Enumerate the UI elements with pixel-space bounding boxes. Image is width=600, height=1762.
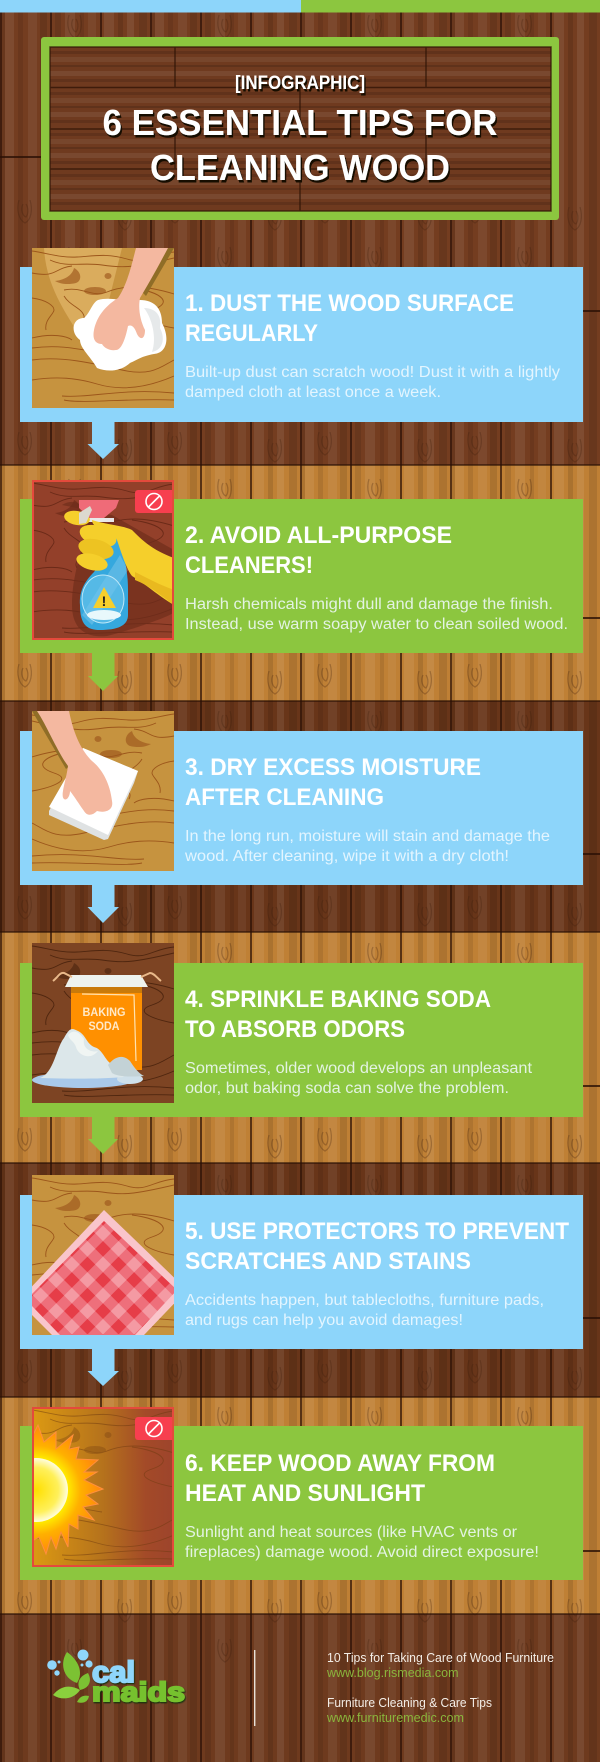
tip 1 body: damped cloth at least once a week. — [185, 384, 441, 401]
icon: baking soda box — [32, 943, 174, 1103]
icon: prohibited badge — [135, 490, 174, 513]
panel: tip 4 — [20, 943, 583, 1117]
source 1 url: www.blog.rismedia.com — [326, 1665, 458, 1680]
icon: tablecloth on wood — [32, 1175, 174, 1335]
tip 6 title: HEAT AND SUNLIGHT — [185, 1480, 425, 1507]
tip 6 body: Sunlight and heat sources (like HVAC vents or — [185, 1524, 517, 1541]
tip 2 title: CLEANERS! — [185, 552, 313, 579]
tip 1 body: Built-up dust can scratch wood! Dust it with a lightly — [185, 364, 560, 381]
title line 2: CLEANING WOOD — [150, 147, 450, 188]
icon: sun heating wood — [32, 1407, 174, 1567]
panel: title — [41, 37, 559, 220]
tip 2 title: 2. AVOID ALL-PURPOSE — [185, 522, 452, 549]
tip 5 body: Accidents happen, but tablecloths, furniture pads, — [185, 1292, 544, 1309]
arrow: tip 4 to tip 5 — [88, 1117, 118, 1154]
top colour bar — [0, 0, 600, 12]
title kicker: [INFOGRAPHIC] — [235, 73, 365, 94]
box label: BAKING — [82, 1007, 126, 1019]
panel: tip 3 — [20, 711, 583, 885]
panel: tip 1 — [20, 248, 583, 422]
tip 4 title: 4. SPRINKLE BAKING SODA — [185, 986, 491, 1013]
tip 5 body: and rugs can help you avoid damages! — [185, 1312, 463, 1329]
tip 4 body: odor, but baking soda can solve the problem. — [185, 1080, 509, 1097]
tip 3 title: 3. DRY EXCESS MOISTURE — [185, 754, 481, 781]
tip 4 body: Sometimes, older wood develops an unpleasant — [185, 1060, 533, 1077]
logo wordmark: cal: cal — [92, 1656, 135, 1689]
panel: tip 5 — [20, 1175, 583, 1349]
tip 1 title: 1. DUST THE WOOD SURFACE — [185, 290, 514, 317]
icon: hand dusting wood with cloth — [32, 248, 174, 408]
source 1 title: 10 Tips for Taking Care of Wood Furniture — [327, 1650, 554, 1665]
tip 2 body: Harsh chemicals might dull and damage the finish. — [185, 596, 553, 613]
logo: Cal Maids — [47, 1650, 185, 1707]
icon: gloved hand with spray bottle — [32, 480, 174, 640]
tip 5 title: 5. USE PROTECTORS TO PREVENT — [185, 1218, 569, 1245]
icon: hand drying wood with towel — [32, 711, 174, 871]
warning mark: ! — [102, 593, 106, 609]
tip 5 title: SCRATCHES AND STAINS — [185, 1248, 471, 1275]
tip 6 body: fireplaces) damage wood. Avoid direct exposure! — [185, 1544, 539, 1561]
source 2 url: www.furnituremedic.com — [326, 1710, 464, 1725]
arrow: tip 3 to tip 4 — [88, 885, 119, 923]
divider — [254, 1650, 255, 1726]
icon: prohibited badge — [135, 1417, 174, 1440]
tip 3 title: AFTER CLEANING — [185, 784, 384, 811]
title line 1: 6 ESSENTIAL TIPS FOR — [102, 102, 498, 143]
source 2 title: Furniture Cleaning & Care Tips — [327, 1695, 492, 1710]
tip 4 title: TO ABSORB ODORS — [185, 1016, 405, 1043]
logo wordmark: maids: maids — [92, 1677, 185, 1707]
panel: tip 2 — [20, 480, 583, 653]
tip 3 body: wood. After cleaning, wipe it with a dry cloth! — [184, 848, 509, 865]
tip 1 title: REGULARLY — [185, 320, 318, 347]
arrow: tip 5 to tip 6 — [88, 1349, 119, 1386]
tip 6 title: 6. KEEP WOOD AWAY FROM — [185, 1450, 495, 1477]
arrow: tip 2 to tip 3 — [88, 653, 118, 691]
tip 3 body: In the long run, moisture will stain and damage the — [185, 828, 550, 845]
arrow: tip 1 to tip 2 — [88, 422, 119, 459]
sources — [326, 1650, 554, 1725]
tip 2 body: Instead, use warm soapy water to clean soiled wood. — [185, 616, 568, 633]
panel: tip 6 — [4, 1407, 583, 1580]
box label: SODA — [88, 1021, 120, 1033]
